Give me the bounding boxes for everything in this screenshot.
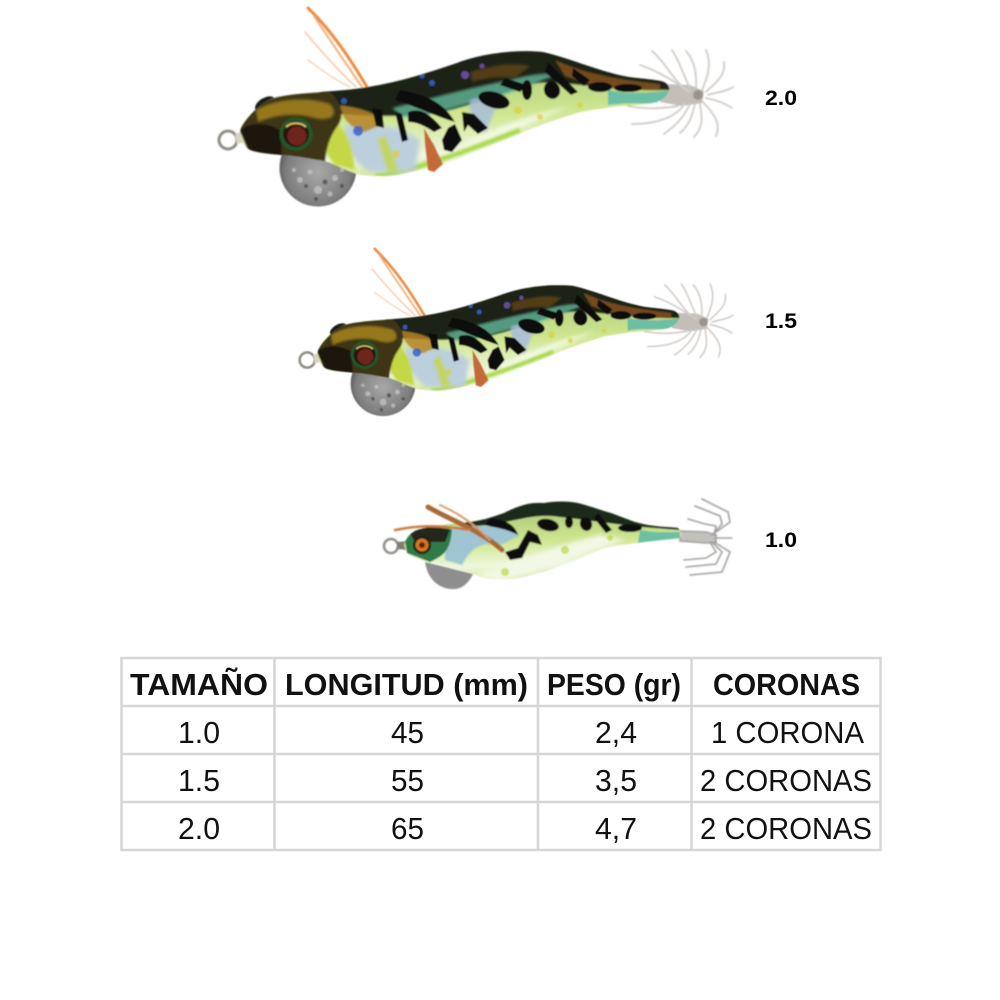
table header row: LONGITUD (mm)	[285, 667, 528, 702]
table row 1.0: 2,4	[595, 715, 637, 750]
small lure eye	[413, 536, 431, 554]
table row 2.0	[178, 811, 872, 846]
table header row: PESO (gr)	[547, 667, 681, 702]
table header row: CORONAS	[713, 667, 860, 702]
table row 1.5	[178, 763, 872, 798]
table row 1.5: 1.5	[178, 763, 220, 798]
table grid	[121, 658, 881, 850]
table header row	[130, 667, 860, 702]
table row 2.0: 2.0	[178, 811, 220, 846]
table row 1.0	[178, 715, 864, 750]
lure size 1.5	[300, 249, 733, 416]
table row 2.0: 2 CORONAS	[700, 811, 872, 846]
table header row: TAMAÑO	[130, 667, 268, 702]
lure size 2.0	[219, 8, 733, 206]
lure size 1.0	[384, 495, 732, 589]
small lure hooks	[680, 499, 732, 575]
table row 1.5: 3,5	[595, 763, 637, 798]
table row 2.0: 65	[391, 811, 424, 846]
table row 1.0: 1.0	[178, 715, 220, 750]
table row 1.0: 45	[391, 715, 424, 750]
table row 1.5: 55	[391, 763, 424, 798]
small lure weight	[425, 562, 473, 589]
size label 1.0: 1.0	[765, 529, 797, 552]
table row 1.0: 1 CORONA	[711, 715, 864, 750]
specifications table	[121, 658, 881, 850]
small lure body	[403, 500, 682, 580]
size label 1.5: 1.5	[765, 310, 797, 333]
small lure ring	[384, 539, 398, 553]
table row 1.5: 2 CORONAS	[700, 763, 872, 798]
table row 2.0: 4,7	[595, 811, 637, 846]
size label 2.0: 2.0	[765, 87, 797, 110]
small lure feather	[395, 505, 502, 550]
